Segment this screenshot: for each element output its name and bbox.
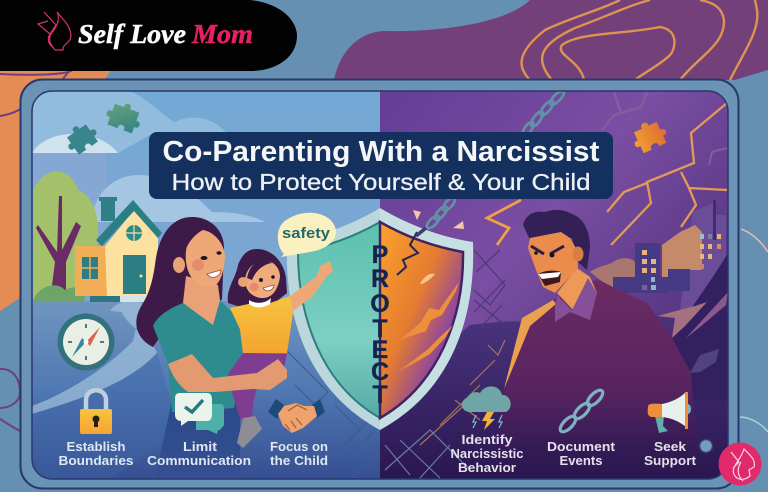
title banner: Co-Parenting With a Narcissist <box>162 136 600 168</box>
label: identify narcissistic behavior <box>450 433 524 475</box>
mother arm <box>168 354 287 392</box>
decorative right side curves <box>740 229 768 432</box>
icon: storm cloud <box>462 386 511 430</box>
label: document events <box>547 440 616 468</box>
icon: handshake <box>268 399 325 433</box>
label: identify narcissistic behavior: Identify <box>462 433 513 447</box>
PROTECT vertical word: P <box>372 241 388 269</box>
child shoe <box>237 416 262 448</box>
icon: megaphone <box>648 392 691 433</box>
shield <box>287 208 473 430</box>
main illustration panel <box>32 89 728 479</box>
PROTECT vertical word: O <box>370 290 390 318</box>
person: mother and daughter <box>136 217 333 479</box>
child shirt <box>230 296 293 353</box>
label: limit communication: Communication <box>147 454 251 468</box>
chain top <box>521 92 566 132</box>
label: identify narcissistic behavior: Narcissistic <box>450 447 524 461</box>
label: seek support: Support <box>644 454 697 468</box>
sweater <box>500 279 696 437</box>
logo badge <box>0 0 297 71</box>
crack <box>397 232 418 275</box>
label: seek support: Seek <box>654 440 686 454</box>
puzzle piece left lower <box>67 124 98 155</box>
icon: padlock <box>80 390 112 434</box>
city skyline <box>680 203 726 310</box>
dark hill <box>672 254 728 394</box>
child face <box>245 261 280 298</box>
icon: butterfly woman logo <box>38 12 71 50</box>
icon: tree <box>33 171 98 301</box>
PROTECT vertical word: T <box>372 381 388 409</box>
icon: chain links <box>558 388 605 434</box>
panel: left safe side <box>32 91 380 479</box>
hair <box>523 210 590 270</box>
icon: chat bubbles <box>175 393 224 434</box>
dot marker <box>700 440 712 452</box>
label: limit communication: Limit <box>183 440 218 454</box>
mother shirt <box>153 300 243 412</box>
collar <box>555 278 597 322</box>
decorative purple blob top right <box>334 0 768 80</box>
label: document events: Events <box>560 454 603 468</box>
mother lower body <box>160 403 240 464</box>
neck <box>557 268 597 312</box>
callout: safety speech bubble: safety <box>282 225 331 242</box>
panel: right danger side <box>380 91 728 479</box>
label: focus on the child: Focus on <box>270 440 328 454</box>
label: establish boundaries: Boundaries <box>58 454 134 468</box>
mother face <box>186 230 225 287</box>
logo badge: Self Love <box>78 19 186 49</box>
puzzle piece left upper <box>106 104 140 134</box>
label: focus on the child <box>270 440 328 468</box>
mother neck <box>183 276 220 325</box>
logo badge: Mom <box>191 19 253 49</box>
outer frame <box>20 80 738 488</box>
person: angry man <box>500 210 696 437</box>
mother hair <box>136 217 224 347</box>
shards <box>413 210 421 220</box>
puzzle piece right <box>634 122 666 154</box>
label: document events: Document <box>547 440 616 454</box>
chain link fence <box>286 250 505 478</box>
face <box>528 232 578 293</box>
callout: safety speech bubble <box>278 213 336 257</box>
icon: house <box>75 197 162 302</box>
label: seek support <box>644 440 697 468</box>
label: limit communication <box>147 440 251 468</box>
child arm <box>290 261 333 311</box>
PROTECT vertical word: R <box>371 265 389 293</box>
label: establish boundaries: Establish <box>66 440 126 454</box>
label: identify narcissistic behavior: Behavior <box>458 461 516 475</box>
PROTECT vertical word: E <box>372 336 388 364</box>
icon: compass <box>58 314 114 370</box>
icon: round pink logo badge <box>718 442 762 486</box>
child pants <box>228 353 287 419</box>
label: focus on the child: the Child <box>270 454 328 468</box>
title banner: How to Protect Yourself & Your Child <box>172 169 590 195</box>
title banner <box>149 132 613 199</box>
PROTECT vertical word <box>371 245 389 404</box>
PROTECT vertical word: T <box>372 315 388 343</box>
chain at shield crack <box>416 196 457 236</box>
child hair <box>228 249 287 307</box>
inner panel border <box>32 91 728 479</box>
cracks in the sky <box>602 92 647 130</box>
label: establish boundaries <box>58 440 134 468</box>
PROTECT vertical word: C <box>371 358 389 386</box>
